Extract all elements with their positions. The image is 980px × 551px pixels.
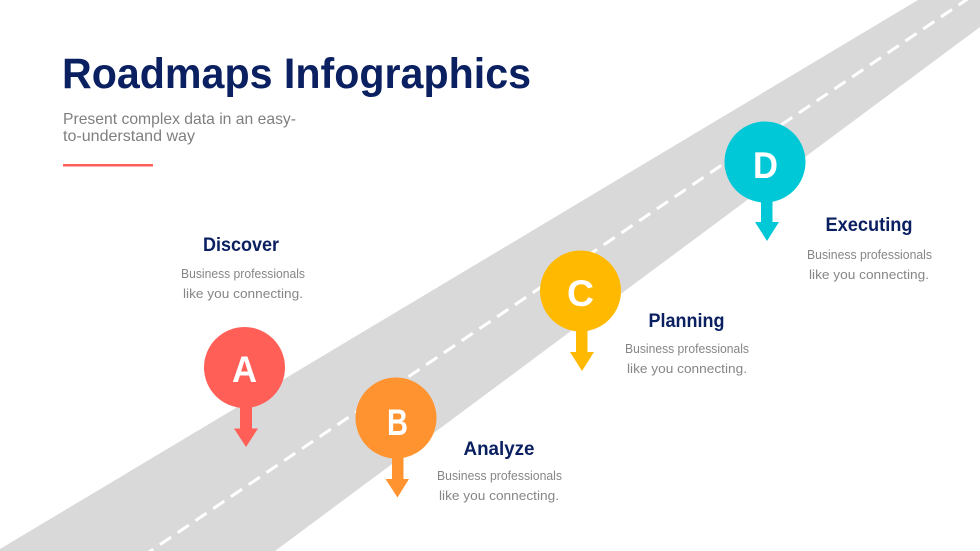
text: Discover: Discover: [203, 235, 280, 256]
text: Analyze: like you connecting.: [439, 488, 559, 503]
subtitle: Present complex data in an easy-: [63, 111, 296, 128]
text: Discover: [181, 235, 305, 301]
text: Analyze: Analyze: [464, 439, 534, 460]
text: Planning: Business professionals: [625, 341, 749, 356]
text: Planning: [625, 311, 749, 376]
marker B: B: [387, 402, 408, 443]
marker D: D: [753, 145, 778, 186]
text: Executing: [807, 215, 932, 282]
accent line: [63, 164, 153, 166]
text: Planning: like you connecting.: [627, 361, 747, 376]
marker A: A: [232, 349, 257, 390]
text: Discover: like you connecting.: [183, 286, 303, 301]
marker A: [204, 327, 285, 447]
text: Planning: Planning: [648, 311, 724, 332]
marker C: C: [567, 273, 594, 314]
marker D: [724, 122, 806, 241]
text: Executing: Executing: [826, 215, 912, 236]
text: Analyze: [437, 439, 562, 503]
text: Executing: Business professionals: [807, 247, 932, 262]
text: Analyze: Business professionals: [437, 468, 562, 483]
text: Executing: like you connecting.: [809, 267, 929, 282]
subtitle: to-understand way: [63, 128, 195, 145]
text: Discover: Business professionals: [181, 266, 305, 281]
subtitle: [63, 111, 296, 145]
title: Roadmaps Infographics: [62, 50, 531, 98]
marker B: [356, 378, 436, 498]
marker C: [540, 250, 621, 371]
